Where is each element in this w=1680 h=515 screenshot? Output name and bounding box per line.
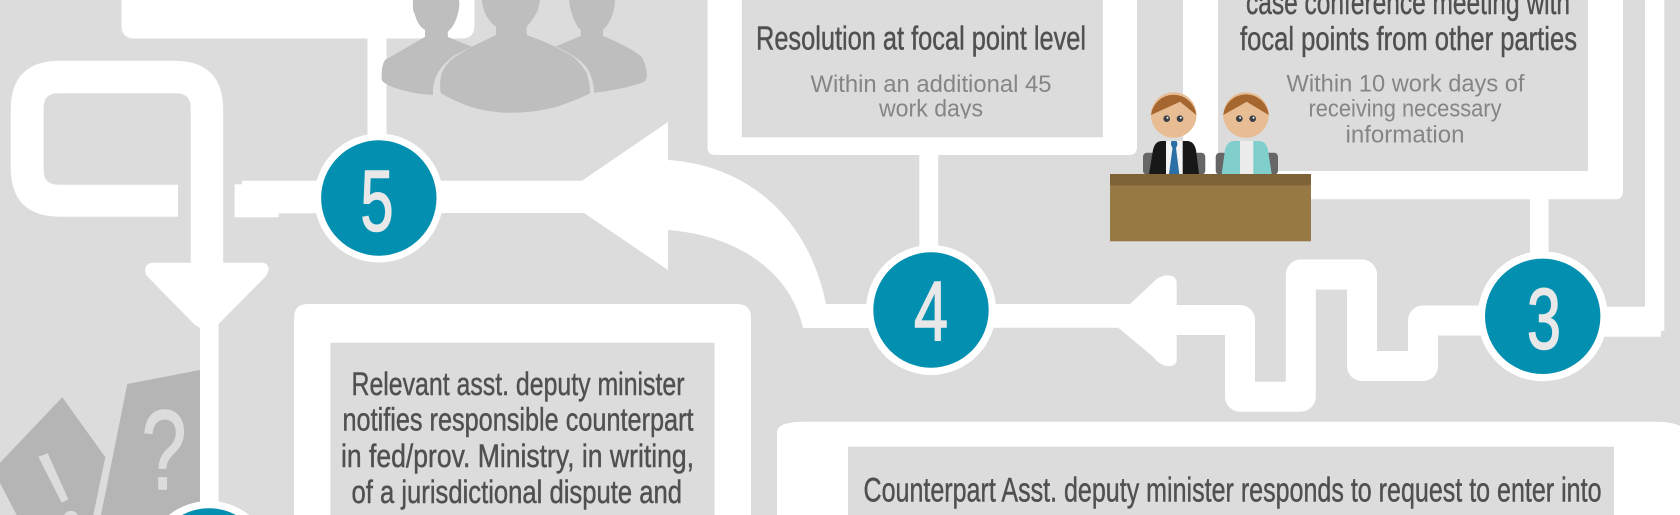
- icon: chairs: [1143, 153, 1278, 175]
- icon: official in teal jacket: [1222, 92, 1272, 174]
- arrow: curved arrow from circle 4 to circle 5: [400, 122, 880, 328]
- icon: warning and question tags: [0, 370, 200, 515]
- icon: right person: [555, 0, 647, 93]
- icon: left person: [382, 0, 472, 95]
- text: ministry notification: notifies responsible counterpart: [342, 402, 694, 438]
- panel: step 4 resolution box: [708, 0, 1137, 155]
- icon: exclamation tag: [0, 397, 105, 515]
- heading: case conference meeting: focal points from other parties: [1240, 20, 1577, 57]
- text: step 3 time limit: information: [1346, 122, 1464, 149]
- text: ministry notification: Relevant asst. deputy minister: [352, 366, 685, 402]
- connector: step 5 box to circle 5: [368, 30, 386, 140]
- step marker (cropped at bottom edge): [169, 501, 249, 515]
- panel: step 5 box (top left, cropped): [122, 0, 474, 38]
- step marker 5: [314, 134, 443, 262]
- connector: outer line from circle 3 up the right side: [1590, 0, 1664, 337]
- text: ministry notification: of a jurisdictional dispute and: [352, 474, 682, 510]
- text: step 4 time limit: work days: [878, 96, 983, 123]
- connector: winding path from circle 3: [1176, 274, 1500, 397]
- icon: official in black suit: [1149, 92, 1199, 174]
- text: step 3 time limit: [1286, 71, 1525, 149]
- connector: stub left of circle 5: [235, 181, 362, 217]
- heading: resolution at focal point level: Resolution at focal point level: [756, 20, 1086, 56]
- text: step 3 time limit: receiving necessary: [1308, 96, 1502, 123]
- connector: box 3 to circle 3: [1530, 195, 1549, 255]
- panel: counterpart response box: [777, 422, 1680, 515]
- connector: circle 4 to arrowhead from circle 3: [980, 275, 1190, 366]
- step marker 3: 3: [1527, 272, 1561, 368]
- step marker 5: 5: [360, 154, 394, 250]
- step marker 3: [1478, 251, 1608, 381]
- icon: question tag: [101, 370, 200, 515]
- panel: step 3 case conference box: [1183, 0, 1623, 199]
- text: ministry notification: in fed/prov. Ministry, in writing,: [341, 438, 694, 474]
- icon: group of people silhouettes: [382, 0, 647, 113]
- arrow: loop from step 5 returning down to the earlier step: [11, 61, 269, 515]
- icon: question tag: ?: [142, 387, 186, 513]
- panel: ministry notification box: [294, 304, 751, 515]
- step marker 4: [866, 245, 996, 375]
- icon: centre person: [440, 0, 590, 113]
- connector: box 4 to circle 4: [919, 150, 938, 250]
- icon: two officials seated at a table: [1110, 92, 1311, 241]
- text: step 3 time limit: Within 10 work days of: [1286, 71, 1525, 98]
- icon: table: [1110, 174, 1311, 241]
- heading: case conference meeting: [1240, 0, 1577, 57]
- text: step 4 time limit: Within an additional 45: [810, 71, 1052, 98]
- text: ministry notification: [341, 366, 694, 510]
- step marker 4: 4: [914, 264, 948, 358]
- text: step 4 time limit: [810, 74, 1050, 118]
